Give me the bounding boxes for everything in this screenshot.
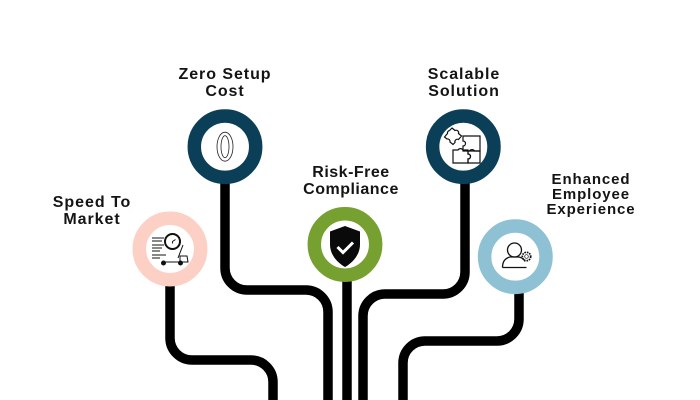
heading: speed to market: Market — [63, 211, 121, 228]
icon: delivery truck with stopwatch — [152, 234, 188, 265]
heading: enhanced employee experience: Employee — [552, 186, 630, 203]
node: scalable solution — [428, 66, 500, 177]
connector: enhanced employee experience — [403, 285, 519, 400]
ring: dark teal — [433, 116, 494, 177]
ring: pink — [139, 218, 201, 280]
node: zero setup cost — [178, 66, 272, 177]
heading: zero setup cost: Zero Setup — [178, 66, 272, 83]
heading: speed to market: Speed To — [53, 194, 131, 211]
heading: enhanced employee experience: Experience — [546, 201, 636, 218]
connector: zero setup cost — [225, 180, 328, 400]
ring: green — [314, 214, 376, 275]
heading: risk-free compliance: Compliance — [303, 181, 399, 198]
heading: risk-free compliance: Risk-Free — [312, 164, 390, 181]
connector: speed to market — [170, 280, 273, 400]
icon: person with gear — [502, 243, 531, 268]
heading: scalable solution: Scalable — [428, 66, 500, 83]
icon: puzzle pieces — [444, 128, 480, 163]
heading: enhanced employee experience: Enhanced — [552, 171, 630, 188]
ring: dark teal — [194, 116, 256, 177]
connector: scalable solution — [363, 180, 465, 400]
heading: zero setup cost: Cost — [205, 83, 245, 100]
icon: zero outline — [217, 132, 233, 161]
icon: shield with check — [330, 226, 360, 267]
connector lines — [170, 180, 519, 400]
heading: scalable solution: Solution — [428, 83, 500, 100]
node: enhanced employee experience — [485, 171, 636, 287]
node: risk-free compliance — [303, 164, 399, 275]
connector: risk-free compliance — [342, 275, 352, 400]
ring: light blue — [485, 226, 546, 287]
node: speed to market — [53, 194, 201, 280]
